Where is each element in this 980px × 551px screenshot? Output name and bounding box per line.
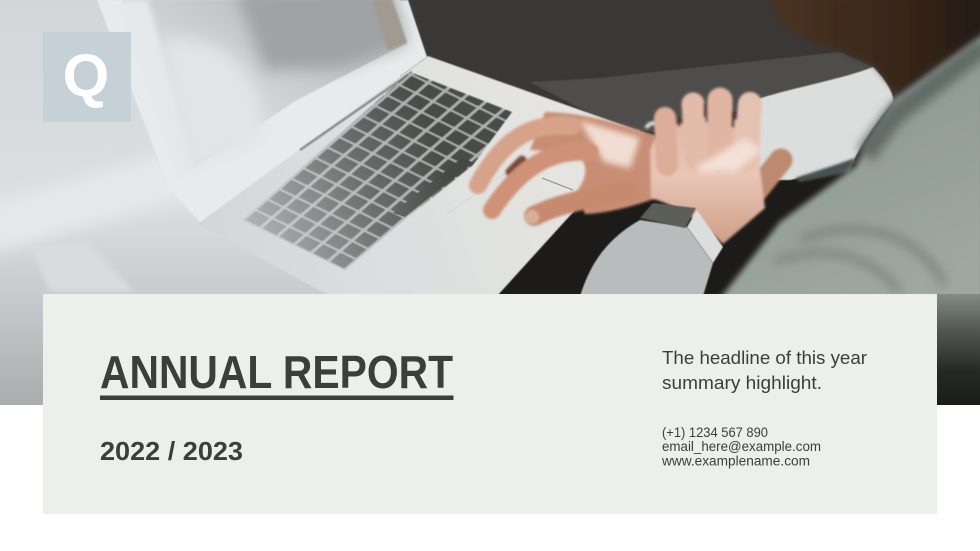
photo: grey sweater xyxy=(720,33,980,405)
logo letter: Q xyxy=(63,42,109,109)
photo: keyboard xyxy=(243,72,512,270)
headline text xyxy=(662,347,867,393)
headline text: summary highlight. xyxy=(662,372,822,393)
photo: typing hand xyxy=(478,112,656,224)
contact details: www.examplename.com xyxy=(661,454,810,468)
year: 2022 / 2023 xyxy=(100,436,243,466)
photo: hazy window background xyxy=(0,0,400,405)
photo: laptop screen lid xyxy=(97,0,427,222)
photo: laptop base xyxy=(274,56,645,294)
photo: watch xyxy=(640,203,723,263)
title: ANNUAL REPORT xyxy=(100,346,453,398)
photo: forearm sleeve xyxy=(580,220,713,296)
title underline xyxy=(100,396,454,400)
photo: resting hand xyxy=(646,100,781,244)
contact details xyxy=(661,425,821,468)
photo: trackpad line xyxy=(445,170,573,215)
logo square xyxy=(43,32,131,122)
headline text: The headline of this year xyxy=(662,347,867,368)
background photo: laptop and hands xyxy=(0,0,980,405)
photo: neck xyxy=(768,0,980,93)
contact details: (+1) 1234 567 890 xyxy=(662,425,768,440)
panel: title card xyxy=(43,294,937,514)
photo: white shirt cuff xyxy=(755,67,893,182)
contact details: email_here@example.com xyxy=(662,439,821,454)
photo: dark sofa xyxy=(400,0,980,300)
